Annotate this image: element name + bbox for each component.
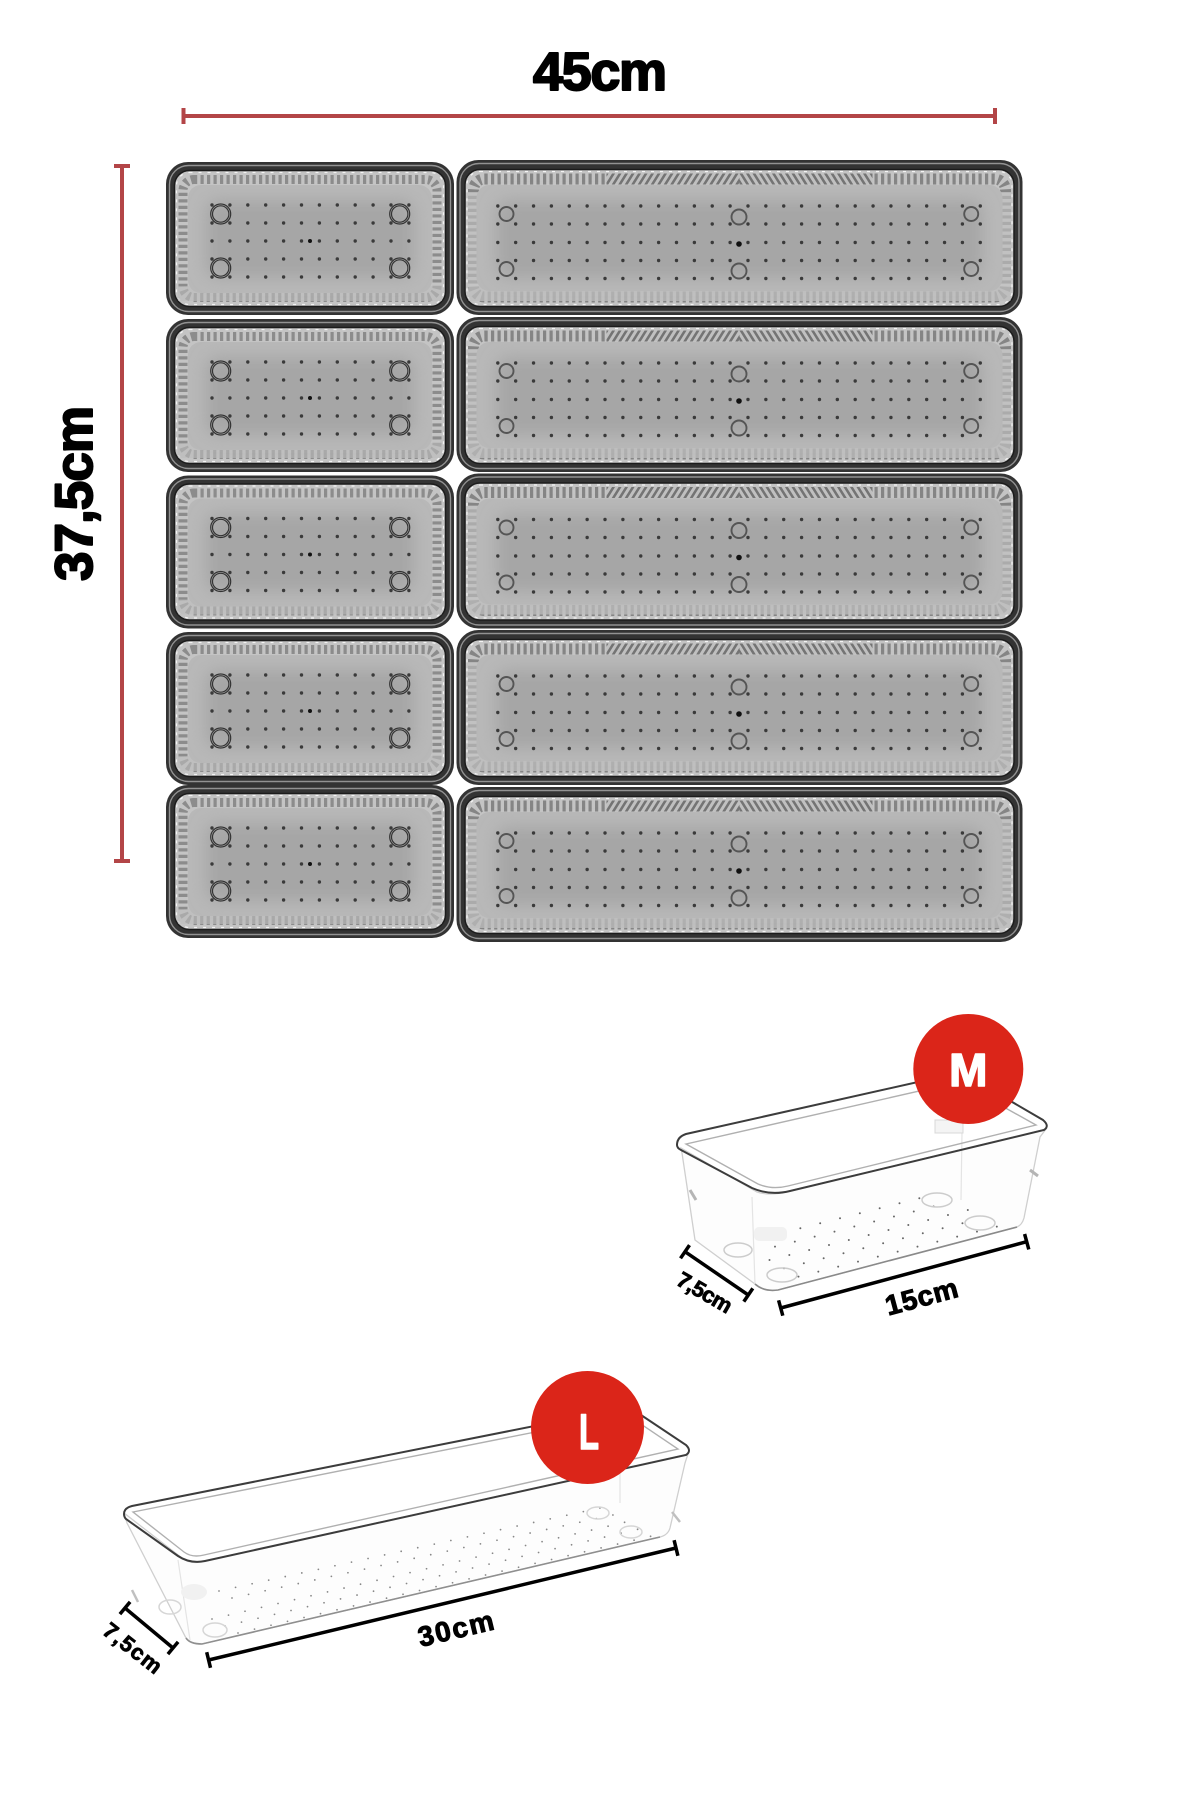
L tray floor dots — [212, 1508, 652, 1633]
panel: size L tray — [98, 1371, 689, 1679]
M tray glass body — [681, 1129, 1046, 1290]
width measure line — [184, 108, 995, 124]
large tray row 3 — [456, 474, 1022, 628]
M tray front tab — [754, 1227, 787, 1241]
L badge: L — [579, 1404, 599, 1460]
M width measure 7,5cm: 7,5cm — [673, 1267, 737, 1318]
L length measure 30cm — [207, 1540, 678, 1668]
panel: top view tray grid — [166, 160, 1022, 942]
L tray rim — [124, 1408, 689, 1562]
L tray glass body — [124, 1454, 688, 1644]
small tray row 1 — [166, 162, 454, 315]
L width measure 7,5cm — [98, 1602, 178, 1679]
M tray side tab — [935, 1120, 963, 1133]
M badge: M — [949, 1044, 987, 1096]
L badge — [531, 1371, 644, 1484]
large tray row 4 — [456, 630, 1022, 785]
M badge — [913, 1014, 1023, 1124]
width dimension: 45cm — [184, 42, 995, 124]
M tray floor rings — [724, 1193, 995, 1282]
height label: 37,5cm — [45, 406, 104, 581]
L length measure 30cm: 30cm — [415, 1605, 497, 1653]
large tray row 5 — [456, 787, 1022, 942]
L tray floor rings — [159, 1507, 642, 1637]
M tray rim — [677, 1073, 1047, 1193]
L tray front tab — [181, 1584, 207, 1600]
small tray row 5 — [166, 785, 454, 938]
M tray floor dots — [761, 1193, 997, 1277]
width label: 45cm — [533, 42, 667, 102]
L width measure 7,5cm: 7,5cm — [98, 1617, 167, 1679]
M length measure 15cm: 15cm — [882, 1272, 961, 1321]
small tray row 4 — [166, 632, 454, 785]
panel: size M tray — [673, 1014, 1047, 1321]
M width measure 7,5cm — [673, 1245, 753, 1318]
small tray row 2 — [166, 319, 454, 472]
small tray row 3 — [166, 476, 454, 628]
M length measure 15cm — [779, 1234, 1029, 1321]
height dimension: 37,5cm — [45, 166, 130, 861]
large tray row 2 — [456, 317, 1022, 472]
height measure line — [114, 166, 130, 861]
large tray row 1 — [456, 160, 1022, 315]
